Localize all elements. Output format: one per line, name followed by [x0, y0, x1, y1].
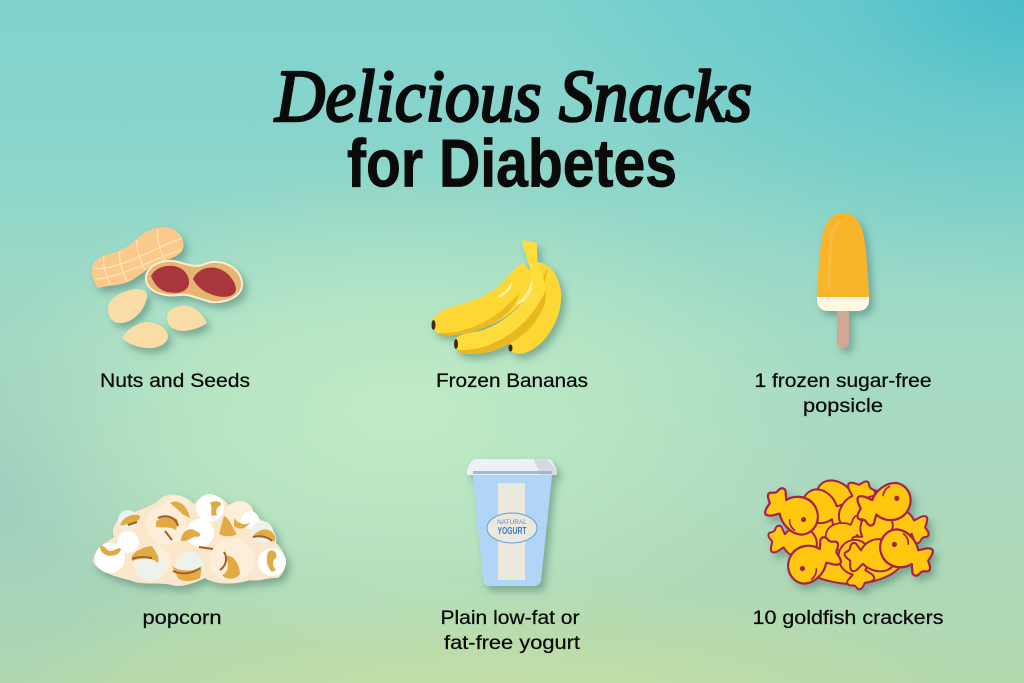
kernel 3 — [122, 322, 168, 348]
label: popcorn: popcorn — [142, 607, 222, 629]
icon: goldfish crackers — [758, 478, 940, 593]
icon: bananas — [432, 240, 561, 354]
front fish — [758, 479, 940, 589]
title bold line: for Diabetes — [347, 126, 677, 202]
title — [274, 56, 752, 202]
lid — [467, 459, 557, 475]
red seed left — [151, 266, 189, 293]
badge text yogurt: YOGURT — [498, 526, 526, 537]
brown centres — [100, 501, 276, 581]
label: nuts and seeds: Nuts and Seeds — [100, 370, 250, 392]
banana middle — [455, 240, 545, 354]
open shell — [146, 261, 242, 302]
banana right — [509, 262, 561, 354]
yogurt badge — [487, 513, 537, 543]
icon: yogurt cup — [467, 459, 557, 586]
red seed right — [193, 267, 236, 297]
pale shells — [118, 510, 273, 581]
title script line: Delicious Snacks — [274, 56, 752, 138]
white puffs — [95, 494, 286, 576]
ice body — [817, 213, 869, 297]
icon: peanuts — [92, 227, 242, 348]
peanut shell — [92, 227, 184, 288]
banana highlights — [498, 279, 532, 305]
cream kernels — [134, 496, 254, 582]
banana left — [433, 263, 534, 335]
popcorn base — [93, 495, 285, 586]
label: yogurt — [440, 607, 581, 654]
label line 1: Plain low-fat or — [440, 607, 580, 629]
badge text natural: NATURAL — [497, 519, 527, 526]
icon: popsicle — [817, 213, 869, 348]
banana tips — [432, 320, 436, 330]
label line 1: 1 frozen sugar-free — [754, 370, 932, 392]
label line 2: fat-free yogurt — [444, 632, 581, 654]
badge oval — [487, 513, 537, 543]
label strip — [498, 483, 525, 580]
stick — [837, 305, 849, 348]
cream layer — [817, 294, 869, 311]
kernel 2 — [167, 306, 207, 331]
label: popsicle — [754, 370, 932, 417]
kernel 1 — [108, 289, 147, 323]
cracker pile base — [789, 487, 911, 584]
label: goldfish: 10 goldfish crackers — [752, 607, 944, 629]
icon: popcorn — [93, 494, 286, 586]
kernel hull lines — [128, 516, 272, 573]
label: frozen bananas: Frozen Bananas — [436, 370, 588, 392]
label line 2: popsicle — [803, 395, 883, 417]
back fish — [767, 478, 932, 593]
cup body — [473, 475, 552, 586]
